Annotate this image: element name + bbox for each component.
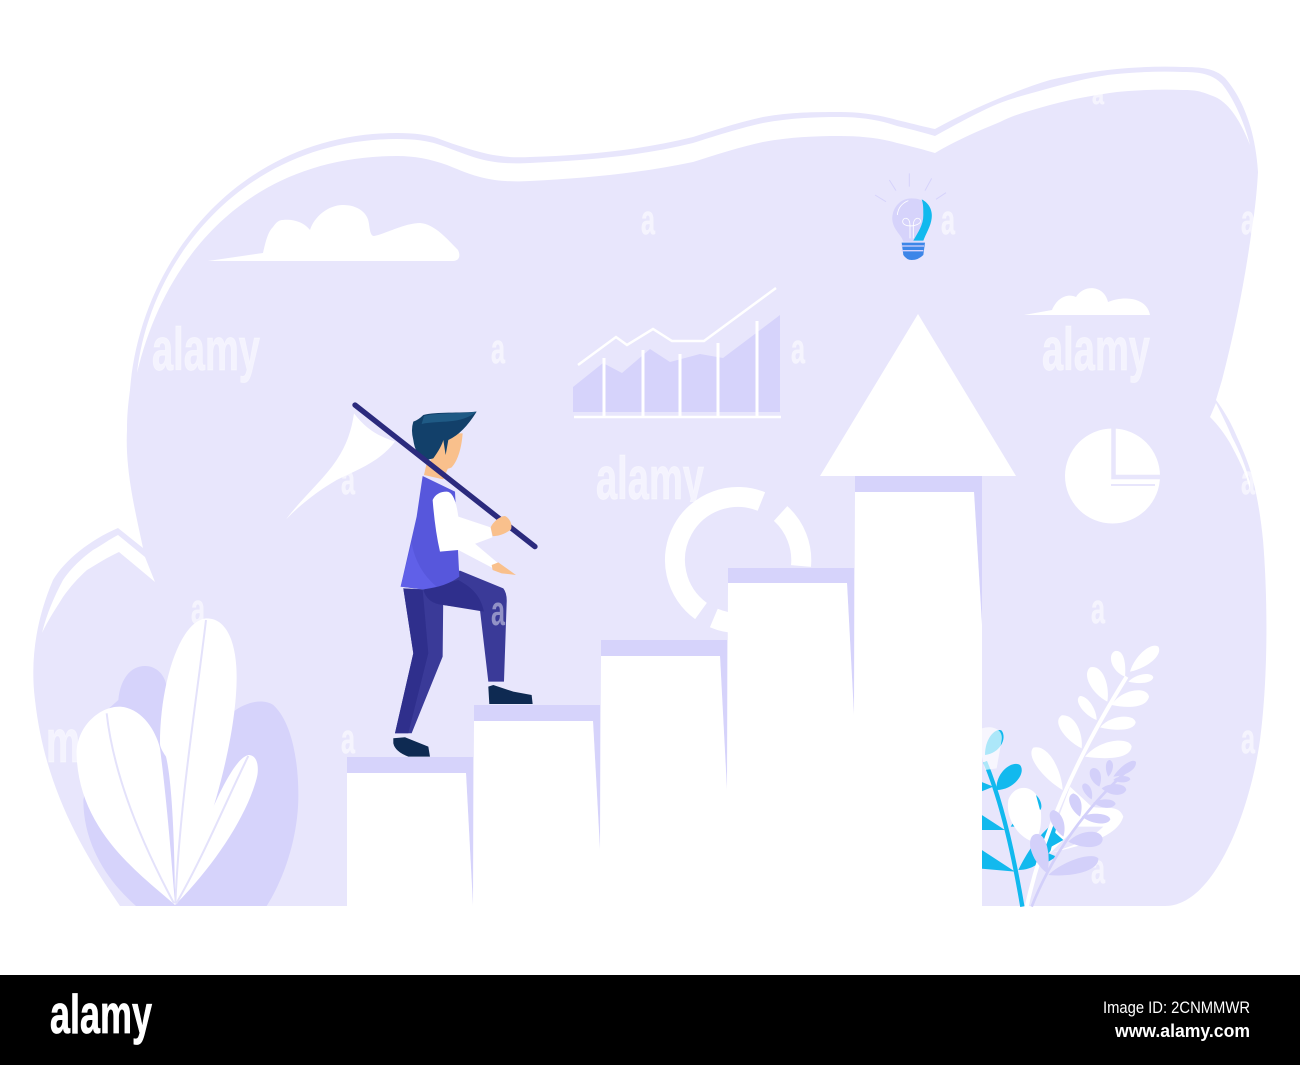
watermark text: a bbox=[1091, 585, 1105, 632]
footer bar bbox=[0, 975, 1300, 1065]
watermark text: a bbox=[941, 196, 955, 243]
far arm bbox=[458, 537, 498, 568]
footer website: www.alamy.com bbox=[1114, 1021, 1250, 1041]
watermark text: m bbox=[46, 708, 80, 775]
watermark text: a bbox=[1092, 79, 1104, 110]
line and area chart bbox=[573, 288, 781, 417]
watermark on trousers: a bbox=[491, 587, 505, 634]
watermark text bbox=[46, 79, 1255, 892]
watermark text: alamy bbox=[596, 445, 704, 512]
hand on pole bbox=[491, 516, 511, 536]
plant right bbox=[977, 646, 1159, 907]
flag bbox=[286, 413, 395, 519]
watermark text: a bbox=[791, 325, 805, 372]
watermark text: a bbox=[641, 196, 655, 243]
front leg bbox=[423, 571, 507, 682]
watermark text: a bbox=[491, 325, 505, 372]
neck bbox=[424, 463, 450, 479]
feet bbox=[488, 685, 533, 704]
stairs with arrow bbox=[347, 314, 1016, 906]
watermark text: a bbox=[341, 715, 355, 762]
footer logo: alamy bbox=[50, 983, 152, 1045]
cloud left bbox=[208, 205, 459, 261]
plant left bbox=[77, 618, 298, 906]
vest bbox=[401, 476, 459, 589]
step white blocks bbox=[347, 492, 982, 906]
pole bbox=[355, 405, 535, 547]
donut chart bbox=[675, 497, 801, 623]
icon: light bulb bbox=[875, 173, 946, 260]
watermark text: a bbox=[1241, 456, 1255, 503]
back leg bbox=[395, 588, 443, 733]
person climbing with flag bbox=[286, 405, 535, 757]
near arm bbox=[433, 492, 492, 552]
face bbox=[428, 433, 463, 469]
watermark text: a bbox=[1091, 845, 1105, 892]
watermark text: a bbox=[1241, 715, 1255, 762]
watermark text: alamy bbox=[152, 316, 260, 383]
watermark text: a bbox=[191, 585, 205, 632]
watermark text: a bbox=[1241, 196, 1255, 243]
pie chart bbox=[1065, 428, 1160, 524]
step shadow strips bbox=[347, 476, 982, 906]
arrow head bbox=[820, 314, 1016, 476]
cloud right bbox=[1024, 288, 1150, 315]
background blob bbox=[33, 67, 1266, 906]
watermark text: a bbox=[341, 456, 355, 503]
footer image id: Image ID: 2CNMMWR bbox=[1103, 998, 1250, 1017]
watermark text: alamy bbox=[1042, 316, 1150, 383]
hair bbox=[412, 412, 477, 461]
watermark text: a bbox=[941, 456, 955, 503]
